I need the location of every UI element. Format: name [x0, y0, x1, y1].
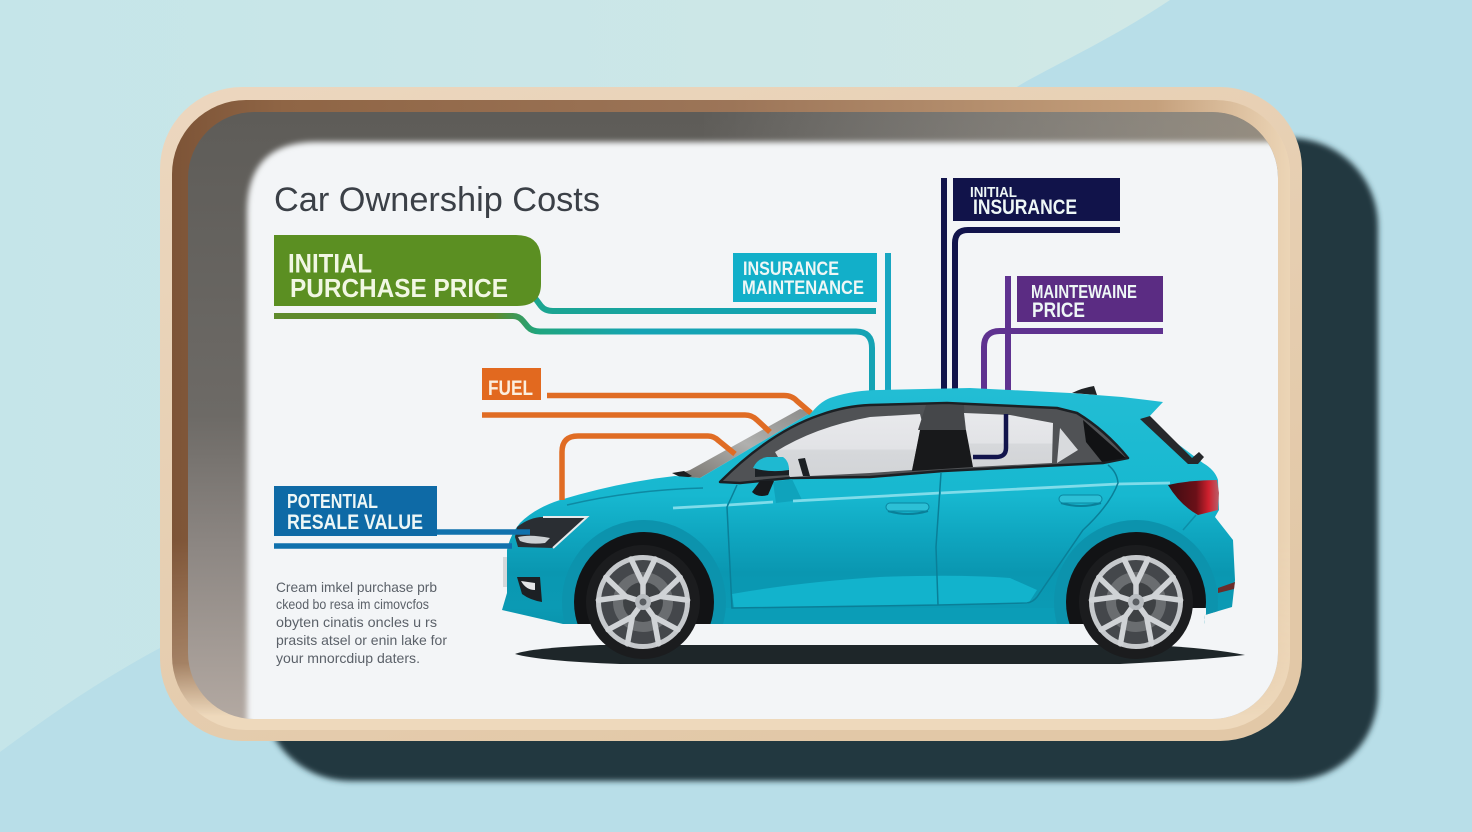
label: insurance maintenance: MAINTENANCE	[742, 277, 864, 299]
car: wheel arch rear	[1054, 520, 1218, 624]
label: potential resale value: RESALE VALUE	[287, 511, 423, 534]
car: rear window	[964, 413, 1053, 467]
connectors: initial insurance	[944, 178, 1120, 392]
car: rear wheel	[1079, 545, 1193, 659]
label: initial insurance: INSURANCE	[973, 196, 1077, 219]
car: hood crease	[567, 488, 703, 505]
wooden tray frame	[160, 87, 1302, 741]
car: body	[502, 388, 1235, 624]
car: visible connector through rear window	[973, 414, 1006, 457]
label: initial purchase price	[274, 235, 541, 306]
label: initial purchase price: PURCHASE PRICE	[290, 273, 508, 303]
car: tail light	[1168, 480, 1219, 515]
car: sill	[720, 608, 1070, 624]
connectors: maintenance price	[984, 276, 1163, 392]
car: front fog lamp	[517, 577, 542, 602]
car: front plate edge	[503, 557, 507, 587]
car: windshield	[678, 409, 812, 478]
label: initial insurance	[953, 178, 1120, 221]
car: front wheel	[586, 545, 700, 659]
description text: Cream imkel purchase prb	[276, 579, 437, 595]
connectors: fuel	[482, 396, 811, 500]
car: wiper	[672, 471, 692, 479]
car: b-pillar	[912, 405, 973, 471]
label: potential resale value	[274, 486, 437, 536]
connector: insurance maintenance vertical	[885, 253, 891, 393]
car: rear spoiler dark strip	[1140, 416, 1204, 464]
car: headlight	[515, 517, 587, 548]
description text: prasits atsel or enin lake for	[276, 632, 447, 648]
car: door lines	[727, 465, 1118, 608]
description text: ckeod bo resa im cimovcfos	[276, 596, 429, 612]
car: front window	[775, 414, 922, 477]
label: fuel: FUEL	[488, 377, 533, 400]
connector lines: initial purchase price	[274, 298, 876, 392]
title: Car Ownership Costs	[274, 181, 600, 219]
car: window frame	[720, 403, 1128, 483]
frame drop shadow	[262, 138, 1378, 781]
label: potential resale value: POTENTIAL	[287, 491, 378, 513]
label: maintenance price: MAINTEWAINE	[1031, 282, 1137, 302]
car: rear dark panel	[1083, 420, 1126, 462]
description text	[276, 579, 447, 666]
label: fuel	[482, 368, 541, 400]
ground shadow	[515, 645, 1245, 664]
car: lower door highlight	[732, 576, 1037, 608]
label: insurance maintenance: INSURANCE	[743, 258, 839, 280]
car: door handles	[886, 495, 1102, 514]
description text: obyten cinatis oncles u rs	[276, 614, 437, 630]
car: mirror	[752, 457, 789, 496]
label: maintenance price	[1017, 276, 1163, 322]
car: wheel arch front	[574, 520, 726, 624]
label: initial purchase price: INITIAL	[288, 248, 372, 278]
car: door mullion	[798, 458, 810, 476]
car illustration	[502, 386, 1235, 684]
car: mirror shadow	[773, 479, 802, 503]
description text: your mnorcdiup daters.	[276, 650, 420, 666]
label: maintenance price: PRICE	[1032, 299, 1085, 322]
car: belt highlight	[673, 483, 1170, 508]
car: rear bumper line and reflector	[1183, 515, 1196, 530]
label: initial insurance: INITIAL	[970, 184, 1017, 201]
car: rear quarter glass	[1057, 428, 1078, 463]
paper panel	[247, 142, 1320, 740]
car: shark fin	[1072, 386, 1097, 395]
connectors: resale value	[274, 532, 530, 546]
label: insurance maintenance	[733, 253, 877, 302]
